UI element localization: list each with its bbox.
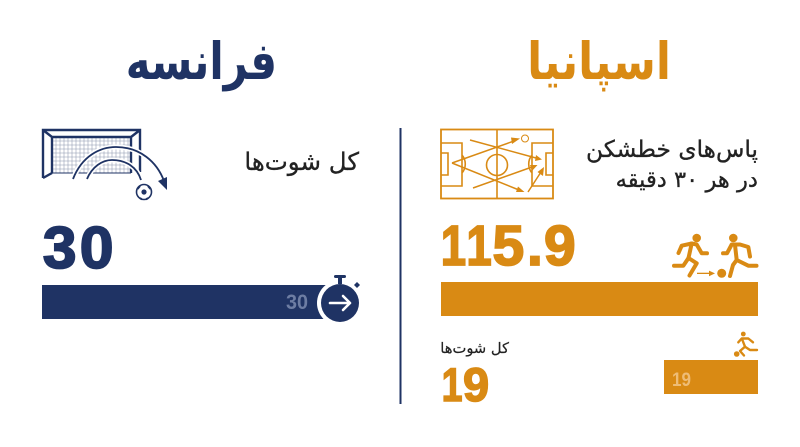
number: Spain 19: 1 — [442, 359, 463, 412]
center divider — [400, 128, 402, 404]
bar: France 30 — [42, 285, 338, 319]
icon: goal with shot arcs — [43, 130, 167, 200]
number: Spain 115.9: 11 — [441, 213, 492, 277]
bar: Spain 115.9 — [441, 282, 758, 316]
label: line-breaking passes per 30 minutes: پاس‌های خطشکن — [586, 136, 758, 163]
number: Spain 115.9 — [441, 213, 576, 278]
number: France 30: 30 — [43, 215, 114, 281]
bar: Spain 19: 19 — [672, 370, 691, 391]
number: Spain 19: 9 — [463, 358, 489, 411]
title: Spain: اسپانیا — [527, 33, 671, 92]
label: total shots (Spain): کل شوت‌ها — [440, 340, 509, 357]
number: Spain 19 — [442, 358, 489, 412]
title: France: فرانسه — [126, 32, 277, 92]
number: Spain 115.9: 5.9 — [492, 214, 576, 278]
label: line-breaking passes per 30 minutes — [586, 136, 758, 193]
label: line-breaking passes per 30 minutes: در هر ۳۰ دقیقه — [616, 167, 758, 193]
label: total shots (France): کل شوت‌ها — [244, 147, 359, 176]
icon: stopwatch with arrow — [317, 275, 363, 326]
icon: football pitch with pass arrows — [441, 130, 553, 198]
icon: player with ball — [734, 332, 757, 357]
icon: two players passing — [674, 234, 756, 278]
bar: France 30: 30 — [286, 291, 308, 314]
bar: Spain 19 — [664, 360, 758, 394]
